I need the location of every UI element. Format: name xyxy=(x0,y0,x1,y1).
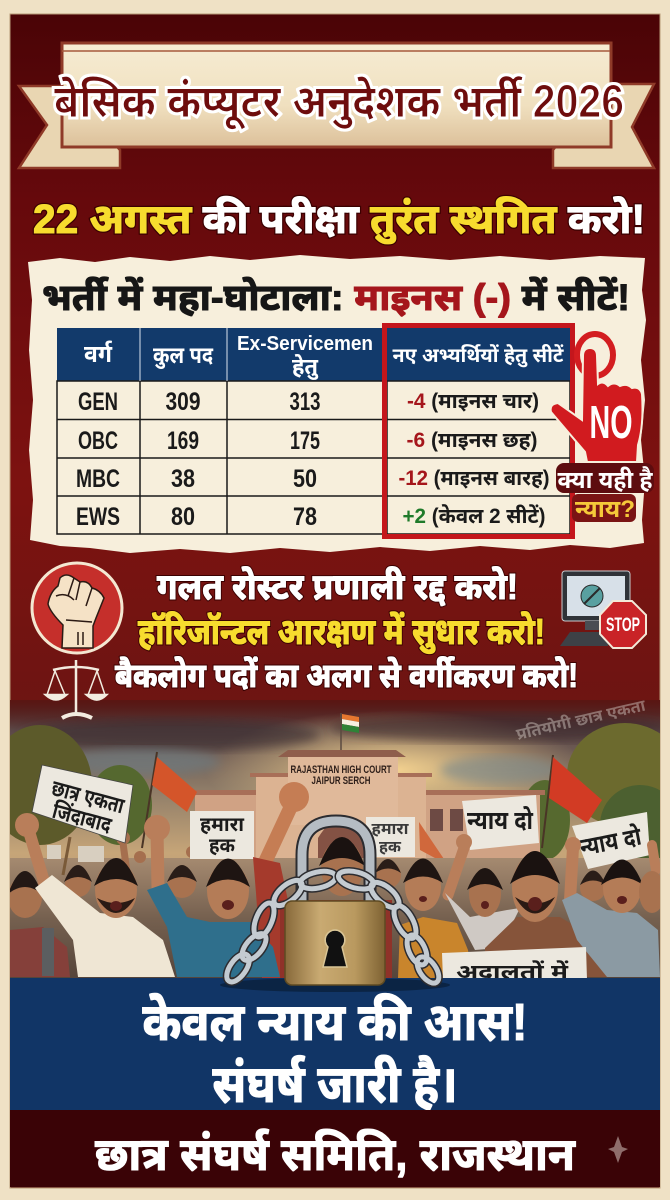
court building: JAIPUR SERCH xyxy=(312,775,371,787)
table rows: 309 xyxy=(166,388,200,416)
protest signs xyxy=(32,765,650,869)
table xyxy=(57,326,572,536)
table rows: 38 xyxy=(171,465,195,493)
demand: cancel roster: गलत रोस्टर प्रणाली रद्द करो! xyxy=(157,566,518,607)
trees xyxy=(0,723,670,865)
callout: is this justice: न्याय? xyxy=(575,496,635,523)
demand: horizontal reservation: हॉरिजॉन्टल आरक्षण में सुधार करो! xyxy=(138,611,545,654)
panel: maroon footer xyxy=(10,1110,660,1187)
table rows: 78 xyxy=(293,503,317,531)
callout: is this justice: क्या यही है xyxy=(558,466,653,494)
protest signs: हमारा xyxy=(200,814,245,836)
table rows: -4 (माइनस चार) xyxy=(407,390,539,413)
raised arms xyxy=(28,800,656,900)
protest signs: हमारा xyxy=(372,821,409,838)
protest signs: न्याय दो xyxy=(577,821,644,862)
red highlight box xyxy=(384,326,572,536)
panel: navy slogan band xyxy=(10,978,660,1114)
icon: padlock and chains xyxy=(220,821,450,992)
icon: computer with stop sign: STOP xyxy=(606,615,640,636)
court name: RAJASTHAN HIGH COURT xyxy=(290,764,392,776)
panel: protest scene xyxy=(0,696,670,984)
protest signs: जिंदाबाद xyxy=(50,798,115,838)
bottom sign xyxy=(442,947,587,980)
table rows: -12 (माइनस बारह) xyxy=(398,467,550,490)
icon: scales of justice xyxy=(46,660,106,718)
icon: raised fist xyxy=(32,563,122,653)
table rows xyxy=(76,388,550,531)
headline: postpone exam: 22 अगस्त की परीक्षा तुरंत स्थगित करो! xyxy=(33,196,645,244)
front protesters xyxy=(8,837,665,978)
protest signs: न्याय दो xyxy=(467,805,534,835)
icon: sparkle xyxy=(608,1136,628,1163)
table rows: EWS xyxy=(76,503,120,531)
headline: struggle continues: संघर्ष जारी है। xyxy=(212,1055,458,1114)
table rows: +2 (केवल 2 सीटें) xyxy=(402,504,546,528)
table rows: 175 xyxy=(290,427,320,455)
protest signs: हक xyxy=(379,839,402,856)
demand: backlog classification: बैकलोग पदों का अलग से वर्गीकरण करो! xyxy=(115,656,578,695)
table rows: GEN xyxy=(78,388,118,416)
table rows: 313 xyxy=(290,388,320,416)
table header xyxy=(84,333,565,380)
heading: mega scam: भर्ती में महा-घोटाला: माइनस (-) में सीटें! xyxy=(42,276,630,318)
orange flags xyxy=(142,752,602,865)
table rows: MBC xyxy=(76,465,120,493)
headline: only hope for justice: केवल न्याय की आस! xyxy=(142,993,528,1052)
panel: torn paper table card xyxy=(28,255,646,553)
table rows: 50 xyxy=(293,465,317,493)
table header: कुल पद xyxy=(153,342,214,369)
table rows: -6 (माइनस छह) xyxy=(406,429,538,452)
NO label: NO xyxy=(590,396,632,448)
table rows: OBC xyxy=(78,427,118,455)
table header: नए अभ्यर्थियों हेतु सीटें xyxy=(392,343,565,368)
panel: title ribbon xyxy=(19,43,654,168)
callout: is this justice xyxy=(556,463,654,523)
table rows: 80 xyxy=(171,503,195,531)
table header: वर्ग xyxy=(84,340,113,368)
panel: protest scene: अदालतों में xyxy=(456,960,569,984)
table header: हेतु xyxy=(292,354,319,380)
icon: computer with stop sign xyxy=(560,571,646,648)
court building xyxy=(190,713,545,870)
table rows: 169 xyxy=(167,427,199,455)
protest signs: हक xyxy=(209,835,235,857)
footer organisation name: छात्र संघर्ष समिति, राजस्थान xyxy=(95,1128,576,1180)
watermark: प्रतियोगी छात्र एकता xyxy=(515,696,647,744)
icon: red NO hand xyxy=(551,334,642,462)
back crowd xyxy=(10,858,660,980)
table header: Ex-Servicemen xyxy=(237,333,373,355)
protest signs: छात्र एकता xyxy=(49,775,127,819)
